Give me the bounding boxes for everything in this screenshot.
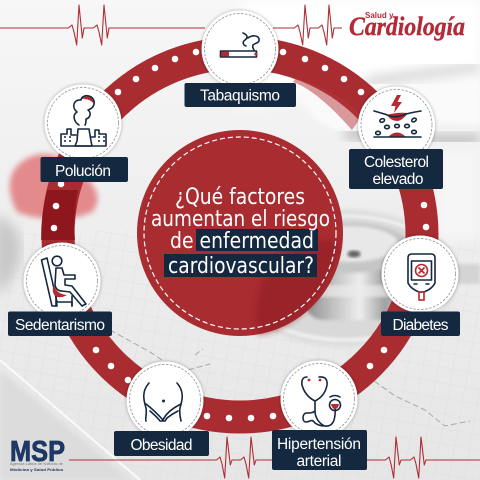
logo: Salud y Cardiología: Salud y [365,11,394,20]
label: Diabetes: Diabetes [392,317,449,334]
factor: Diabetes [381,236,460,336]
label: Sedentarismo: Sedentarismo [15,317,105,334]
icon: factory smoke [61,96,106,146]
factor: Sedentarismo [8,242,112,336]
factor: Polución [40,84,128,182]
logo: MSP agency: Medicina y Salud Pública [10,467,64,472]
ECG line: top [0,5,342,45]
central question circle [137,130,343,336]
icon: stethoscope [302,377,340,426]
factor: Tabaquismo [184,10,296,107]
label: Colesterol elevado: elevado [372,171,424,188]
title: question text [151,185,330,279]
label: Obesidad: Obesidad [130,437,192,454]
icon: clogged artery [374,95,421,137]
label: Polución: Polución [55,163,111,180]
red dotted ring [41,49,429,421]
logo: MSP agency: Agencia Latina de Noticias de [10,462,63,466]
title: question text: aumentan el riesgo [151,207,330,232]
label: Hipertensión arterial: arterial [296,453,342,470]
label: Hipertensión arterial [272,430,367,470]
icon: waist torso [144,383,182,421]
label: Tabaquismo: Tabaquismo [200,88,280,104]
factor: Hipertensión arterial [272,360,367,470]
label: Colesterol elevado [349,149,443,189]
logo: Salud y Cardiología: Cardiología [349,12,465,41]
icon: glucose meter [408,254,435,300]
factor: Colesterol elevado [349,86,443,189]
logo: MSP agency: MSP [10,436,65,468]
title: question text: ¿Qué factores [175,185,305,210]
label: Hipertensión arterial: Hipertensión [277,436,361,453]
icon: cigarette [220,33,259,57]
ECG line: bottom [69,437,480,478]
icon: person sitting [42,256,86,306]
label: Colesterol elevado: Colesterol [364,154,429,171]
title: question text: cardiovascular? [168,254,314,279]
title: question text: de enfermedad [170,229,314,254]
factor: Obesidad [114,362,209,456]
